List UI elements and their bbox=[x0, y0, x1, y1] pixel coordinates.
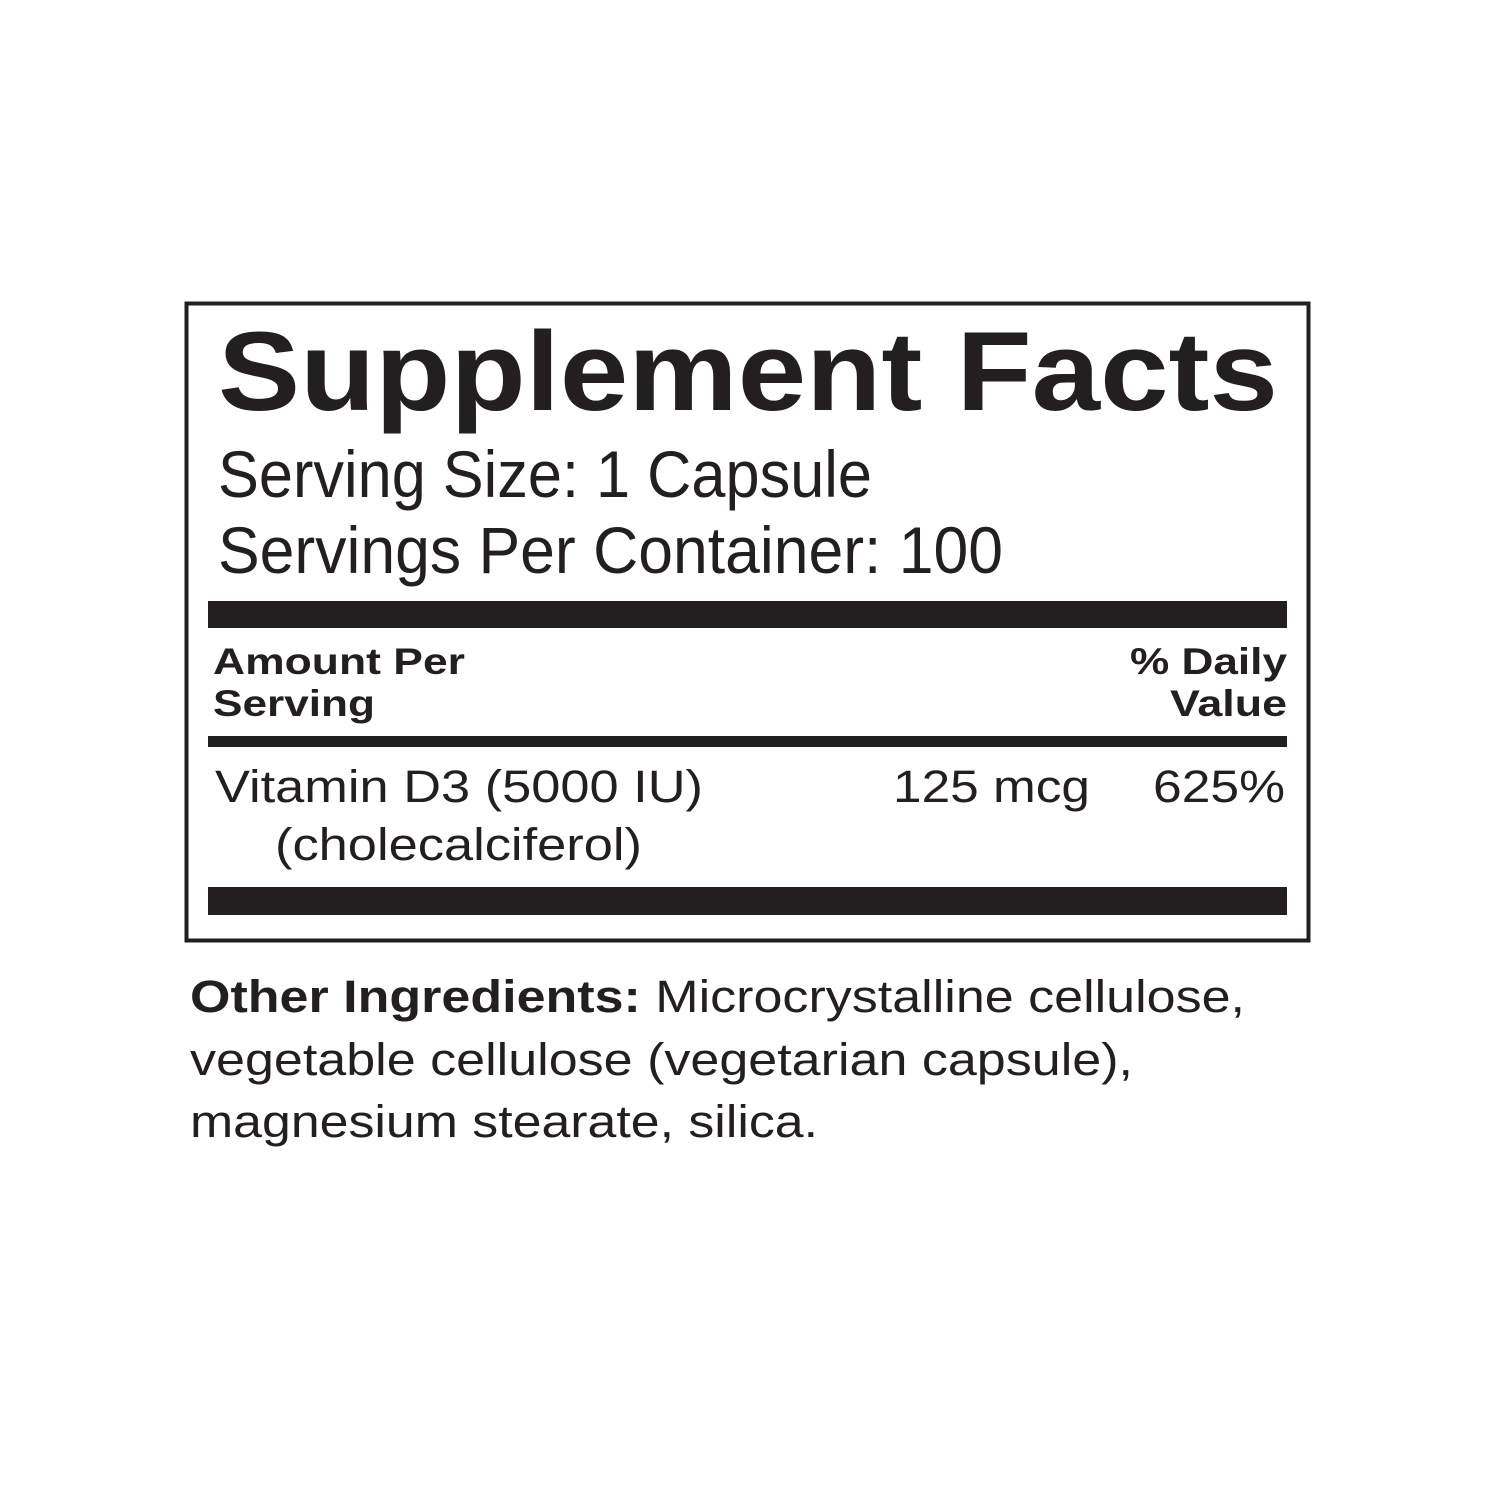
row: vitamin D3: Vitamin D3 (5000 IU) bbox=[215, 761, 703, 812]
header: daily value: % Daily bbox=[1130, 641, 1287, 682]
header: amount per serving: Serving bbox=[213, 683, 375, 724]
thick bar bottom bbox=[208, 887, 1287, 915]
header: amount per serving bbox=[213, 641, 1287, 724]
serving size: Serving Size: 1 Capsule bbox=[218, 437, 872, 511]
panel: supplement facts box bbox=[186, 304, 1308, 940]
row: vitamin D3: 125 mcg bbox=[893, 761, 1090, 812]
servings per container: Servings Per Container: 100 bbox=[218, 513, 1003, 587]
row: vitamin D3: 625% bbox=[1153, 761, 1285, 812]
title: Supplement Facts bbox=[218, 309, 1278, 434]
other ingredients text: magnesium stearate, silica. bbox=[190, 1096, 818, 1147]
thin bar bbox=[208, 736, 1287, 747]
header: amount per serving: Amount Per bbox=[213, 641, 465, 682]
panel: supplement facts box: Value bbox=[1170, 683, 1287, 724]
row: vitamin D3 bbox=[215, 761, 1285, 870]
other ingredients text: Other Ingredients: Microcrystalline cellulose, bbox=[190, 971, 1245, 1022]
thick bar top bbox=[208, 601, 1287, 628]
other ingredients text: vegetable cellulose (vegetarian capsule), bbox=[190, 1034, 1133, 1085]
other ingredients text bbox=[190, 971, 1245, 1147]
row: vitamin D3: (cholecalciferol) bbox=[275, 819, 642, 870]
